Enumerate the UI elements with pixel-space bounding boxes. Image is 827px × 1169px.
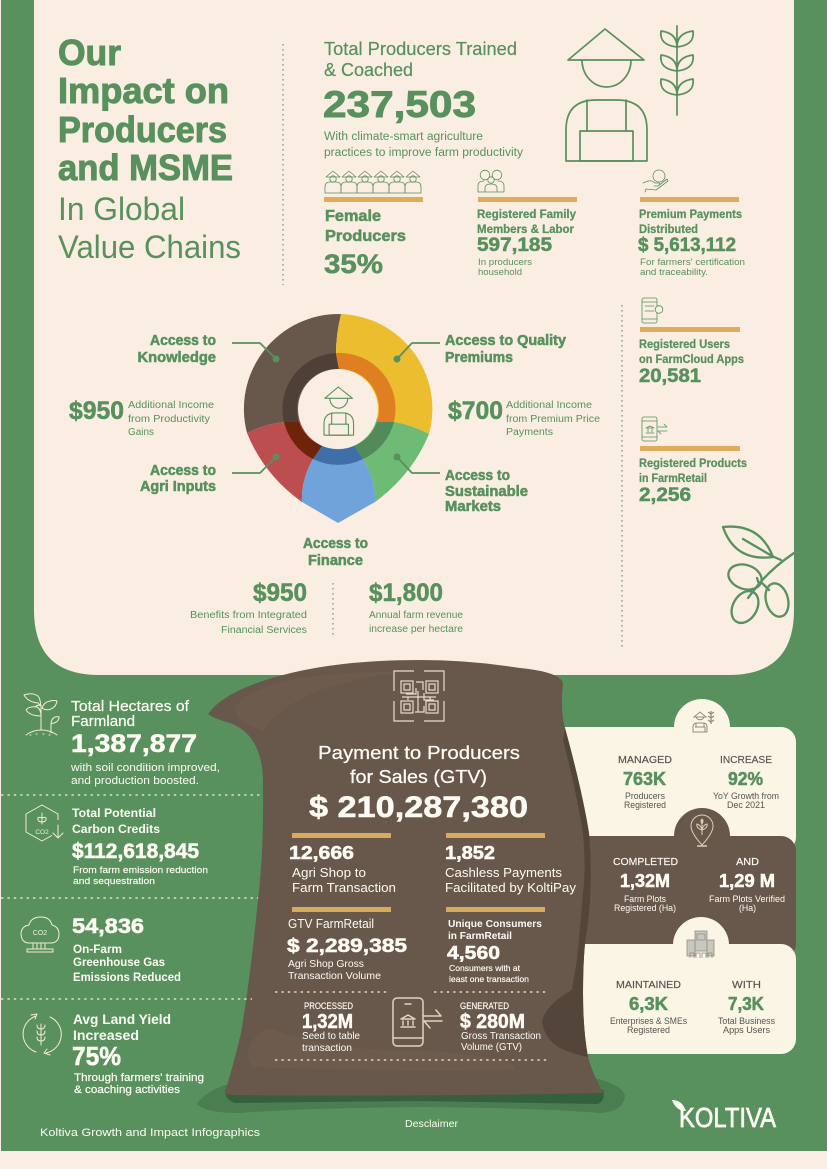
icon: CO2 cloud xyxy=(21,917,59,952)
stat: premium price income: Additional Income xyxy=(506,400,592,411)
label: access to knowledge: Knowledge xyxy=(138,350,216,366)
title: Value Chains xyxy=(58,229,241,265)
stat: completed: COMPLETED xyxy=(613,856,678,868)
stat: and verified xyxy=(709,856,785,913)
stat: with: Apps Users xyxy=(723,1025,770,1035)
icon: family xyxy=(478,170,504,192)
stat: carbon credits xyxy=(72,806,208,887)
label: access to quality premiums: Premiums xyxy=(445,350,513,366)
stat: processed xyxy=(302,1001,360,1054)
stat: with: Total Business xyxy=(718,1016,775,1026)
stat: registered products in farmretail xyxy=(639,417,747,506)
stat: female producers xyxy=(324,171,423,279)
stat: generated: Gross Transaction xyxy=(461,1031,541,1042)
stat: registered users on farmcloud xyxy=(639,298,744,387)
stat: completed xyxy=(613,856,678,913)
stat: avg land yield: 75% xyxy=(72,1041,121,1071)
stat: completed: Farm Plots xyxy=(624,894,666,904)
stat: cashless payments: 1,852 xyxy=(445,843,495,863)
stat: GTV farmretail: GTV FarmRetail xyxy=(288,917,374,931)
stat: premium payments distributed: Distributed xyxy=(639,222,698,236)
stat: agri shop to farm transaction: 12,666 xyxy=(289,843,354,863)
stat: unique consumers xyxy=(446,907,545,984)
stat: completed: Registered (Ha) xyxy=(614,903,676,913)
stat: cashless payments: Facilitated by KoltiPay xyxy=(445,880,576,895)
stat: generated: GENERATED xyxy=(460,1001,509,1011)
stat: productivity income: Additional Income xyxy=(128,400,214,411)
label: access to sustainable markets xyxy=(445,468,528,515)
stat: unique consumers: Unique Consumers xyxy=(448,918,542,930)
stat: financial services benefits: Financial Services xyxy=(221,625,307,636)
label: access to quality premiums: Access to Quality xyxy=(445,333,566,349)
stat: annual farm revenue xyxy=(369,579,463,635)
stat: and verified: AND xyxy=(736,856,759,868)
stat: annual farm revenue: Annual farm revenue xyxy=(369,610,463,621)
icon: yield cycle xyxy=(23,1014,61,1055)
stat: financial services benefits: Benefits from Integrated xyxy=(190,610,307,621)
stat: GTV farmretail: Agri Shop Gross xyxy=(288,958,364,970)
stat: agri shop to farm transaction: Agri Shop to xyxy=(292,865,366,880)
panel: completed farm plots xyxy=(540,808,796,958)
label: access to finance: Access to xyxy=(303,536,368,552)
stat: unique consumers: Consumers with at xyxy=(449,963,521,973)
segment: sustainable markets xyxy=(338,409,429,502)
stat: premium price income: $700 xyxy=(448,397,503,425)
stat: generated: $ 280M xyxy=(460,1011,525,1033)
stat: registered family members: In producers xyxy=(478,257,533,267)
stat: increase: 92% xyxy=(728,769,763,789)
label: access to knowledge: Access to xyxy=(150,333,216,349)
stat: processed: 1,32M xyxy=(302,1011,353,1033)
stat: avg land yield: Through farmers' training xyxy=(74,1072,204,1084)
stat: registered products in farmretail: 2,256 xyxy=(639,485,691,506)
icon: large farmer xyxy=(566,29,647,161)
stat: premium payments distributed: $ 5,613,112 xyxy=(638,235,736,256)
icon: row of farmers xyxy=(325,171,421,193)
stat: completed: 1,32M xyxy=(620,871,670,891)
label: access to sustainable markets: Access to xyxy=(445,468,510,484)
stat: total producers trained: practices to improve farm productivity xyxy=(324,147,523,159)
stat: greenhouse gas: Greenhouse Gas xyxy=(73,955,165,969)
sack bottom edge xyxy=(225,1090,604,1104)
stat: managed: 763K xyxy=(623,769,666,789)
ground shadow xyxy=(197,1077,625,1113)
stat: total producers trained: & Coached xyxy=(324,60,413,80)
icon: farmer and wheat xyxy=(693,711,714,732)
logo: Koltiva: KOLTIVA xyxy=(679,1102,776,1133)
stat: processed: transaction xyxy=(302,1043,352,1054)
stat: maintained: Registered xyxy=(627,1025,670,1035)
stat: agri shop to farm transaction xyxy=(289,833,396,895)
stat: maintained xyxy=(610,980,687,1035)
stat: and verified: (Ha) xyxy=(739,903,756,913)
stat: registered products in farmretail: Registered Products xyxy=(639,456,747,470)
icon: phone with bank xyxy=(642,417,667,441)
footer title: Koltiva Growth and Impact Infographics xyxy=(40,1127,261,1139)
stat: registered family members: household xyxy=(478,267,522,277)
stat: generated xyxy=(460,1001,541,1053)
title xyxy=(58,32,241,265)
segment: finance xyxy=(302,409,375,523)
stat: and verified: 1,29 M xyxy=(719,871,775,891)
stat: premium payments distributed: and traceability. xyxy=(640,267,708,277)
stat: registered users on farmcloud: Registered Users xyxy=(639,337,730,351)
stat: greenhouse gas: 54,836 xyxy=(72,915,144,938)
chart: access pin diagram xyxy=(244,314,432,523)
stat: cashless payments: Cashless Payments xyxy=(445,865,562,880)
stat: registered products in farmretail: in FarmRetail xyxy=(639,471,707,485)
stat: total producers trained: 237,503 xyxy=(323,84,476,125)
segment: agri inputs xyxy=(247,409,338,502)
stat: maintained: 6,3K xyxy=(629,994,668,1014)
stat: carbon credits: Total Potential xyxy=(72,806,156,820)
stat: GTV farmretail xyxy=(287,907,408,982)
stat: managed: Registered xyxy=(624,800,666,810)
stat: carbon credits: Carbon Credits xyxy=(72,822,160,836)
title: Impact on xyxy=(58,70,229,111)
callout lines xyxy=(232,343,440,473)
icon: sprout xyxy=(24,694,59,735)
stat: total hectares: Farmland xyxy=(71,714,135,730)
segment: quality premiums xyxy=(336,314,432,434)
stat: processed: Seed to table xyxy=(302,1031,360,1042)
stat: avg land yield: Increased xyxy=(73,1027,139,1043)
panel: top cream impact panel xyxy=(34,0,794,675)
stat: annual farm revenue: increase per hectare xyxy=(369,624,463,635)
stat: increase: INCREASE xyxy=(720,755,772,766)
title: In Global xyxy=(58,191,185,227)
icon: wheat xyxy=(661,26,693,115)
stat: premium price income: Payments xyxy=(506,427,553,438)
stat: productivity income: Gains xyxy=(128,427,154,438)
stat: total hectares: 1,387,877 xyxy=(71,730,197,758)
stat: agri shop to farm transaction: Farm Transaction xyxy=(292,880,396,895)
stat: processed: PROCESSED xyxy=(304,1001,353,1011)
stat: female producers: Female xyxy=(325,208,381,225)
sack fold: lower highlight xyxy=(248,1028,515,1071)
stat: and verified: Farm Plots Verified xyxy=(709,894,785,904)
label: access to sustainable markets: Markets xyxy=(445,499,501,515)
stat: registered users on farmcloud: on FarmCloud Apps xyxy=(639,352,744,366)
icon: phone with check xyxy=(642,298,663,323)
stat: productivity income: $950 xyxy=(69,397,124,425)
icon: hand with coin xyxy=(643,170,668,192)
title: and MSME xyxy=(58,147,233,188)
stat: total producers trained: Total Producers Trained xyxy=(324,39,517,59)
stat: increase xyxy=(713,755,779,810)
stat: greenhouse gas: Emissions Reduced xyxy=(73,970,181,984)
segment: knowledge xyxy=(244,314,341,433)
panel: managed producers xyxy=(540,699,796,852)
stat: total producers trained: With climate-smart agriculture xyxy=(324,131,483,143)
panel: maintained enterprises xyxy=(540,917,796,1054)
label: access to knowledge xyxy=(138,333,216,366)
stat: premium payments distributed: Premium Payments xyxy=(639,207,742,221)
stat: premium payments distributed: For farmers' certification xyxy=(640,257,745,267)
stat: total hectares: and production boosted. xyxy=(71,775,199,787)
stat: premium payments distributed xyxy=(638,170,745,277)
stat: managed: Producers xyxy=(625,791,665,801)
label: access to finance xyxy=(303,536,368,569)
stat: with: 7,3K xyxy=(728,994,764,1014)
stat: financial services benefits xyxy=(190,579,307,636)
icon: QR code xyxy=(394,671,444,721)
title: Our xyxy=(58,32,121,73)
stat: managed: MANAGED xyxy=(618,755,672,766)
stat: maintained: Enterprises & SMEs xyxy=(610,1016,687,1026)
stat: increase: YoY Growth from xyxy=(713,791,779,801)
stat: total producers trained xyxy=(323,39,523,159)
stat: female producers: Producers xyxy=(325,228,406,245)
icon: centre farmer xyxy=(324,387,354,435)
label: access to agri inputs xyxy=(140,463,216,495)
stat: unique consumers: in FarmRetail xyxy=(448,930,512,942)
label: access to agri inputs: Access to xyxy=(150,463,216,479)
stat: maintained: MAINTAINED xyxy=(616,980,681,991)
heading: payment to producers: $ 210,287,380 xyxy=(309,791,528,824)
stat: increase: Dec 2021 xyxy=(727,800,765,810)
stat: with xyxy=(718,980,775,1035)
stat: avg land yield: & coaching activities xyxy=(74,1084,181,1096)
label: access to agri inputs: Agri Inputs xyxy=(140,479,216,495)
icon: buildings xyxy=(687,931,714,958)
stat: total hectares xyxy=(70,699,220,787)
sack fold: top highlight xyxy=(235,672,400,732)
stat: unique consumers: least one transaction xyxy=(449,974,529,984)
stat: productivity income xyxy=(69,397,214,438)
stat: avg land yield xyxy=(72,1011,204,1096)
stat: premium price income: from Premium Price xyxy=(506,414,600,425)
sack fold: dark right crease xyxy=(542,728,591,1057)
icon: olive branch xyxy=(723,527,794,628)
stat: cashless payments xyxy=(445,833,576,895)
heading: payment to producers: for Sales (GTV) xyxy=(350,767,487,787)
label: access to sustainable markets: Sustainable xyxy=(445,484,528,500)
stat: registered users on farmcloud: 20,581 xyxy=(639,366,701,387)
stat: total hectares: Total Hectares of xyxy=(71,699,190,715)
heading: payment to producers: Payment to Producers xyxy=(318,743,520,763)
stat: registered family members: Members & Labor xyxy=(477,222,574,236)
icon: carbon credit hexagon: CO2 xyxy=(35,829,49,836)
stat: total hectares: with soil condition improved, xyxy=(70,762,220,774)
stat: financial services benefits: $950 xyxy=(253,579,307,607)
inner ring xyxy=(282,353,396,465)
stat: managed xyxy=(618,755,672,810)
stat: avg land yield: Avg Land Yield xyxy=(73,1011,171,1027)
stat: registered family members: Registered Family xyxy=(477,207,576,221)
icon: phone with bank and arrows xyxy=(393,998,442,1046)
stat: with: WITH xyxy=(732,980,761,991)
stat: carbon credits: and sequestration xyxy=(73,876,155,887)
stat: productivity income: from Productivity xyxy=(128,414,210,425)
stat: registered family members xyxy=(477,170,577,277)
disclaimer: Desclaimer xyxy=(405,1119,459,1130)
stat: generated: Volume (GTV) xyxy=(461,1042,522,1053)
label: access to finance: Finance xyxy=(308,553,363,569)
stat: carbon credits: $112,618,845 xyxy=(72,840,199,863)
stat: GTV farmretail: $ 2,289,385 xyxy=(287,936,408,957)
stat: unique consumers: 4,560 xyxy=(447,943,500,963)
stat: registered family members: 597,185 xyxy=(477,235,552,256)
heading: payment to producers xyxy=(309,743,528,824)
title: Producers xyxy=(58,109,227,150)
stat: annual farm revenue: $1,800 xyxy=(369,579,443,607)
stat: female producers: 35% xyxy=(324,249,383,279)
icon: carbon credit hexagon xyxy=(26,805,64,841)
centre circle xyxy=(298,369,378,449)
icon: CO2 cloud: CO2 xyxy=(33,930,47,937)
stat: premium price income xyxy=(448,397,600,438)
stat: greenhouse gas xyxy=(72,915,181,984)
label: access to quality premiums xyxy=(445,333,566,366)
sack body xyxy=(208,660,603,1096)
stat: GTV farmretail: Transaction Volume xyxy=(288,970,381,982)
icon: location pin plant xyxy=(691,815,713,846)
stat: greenhouse gas: On-Farm xyxy=(73,942,122,956)
stat: carbon credits: From farm emission reduction xyxy=(73,865,208,876)
